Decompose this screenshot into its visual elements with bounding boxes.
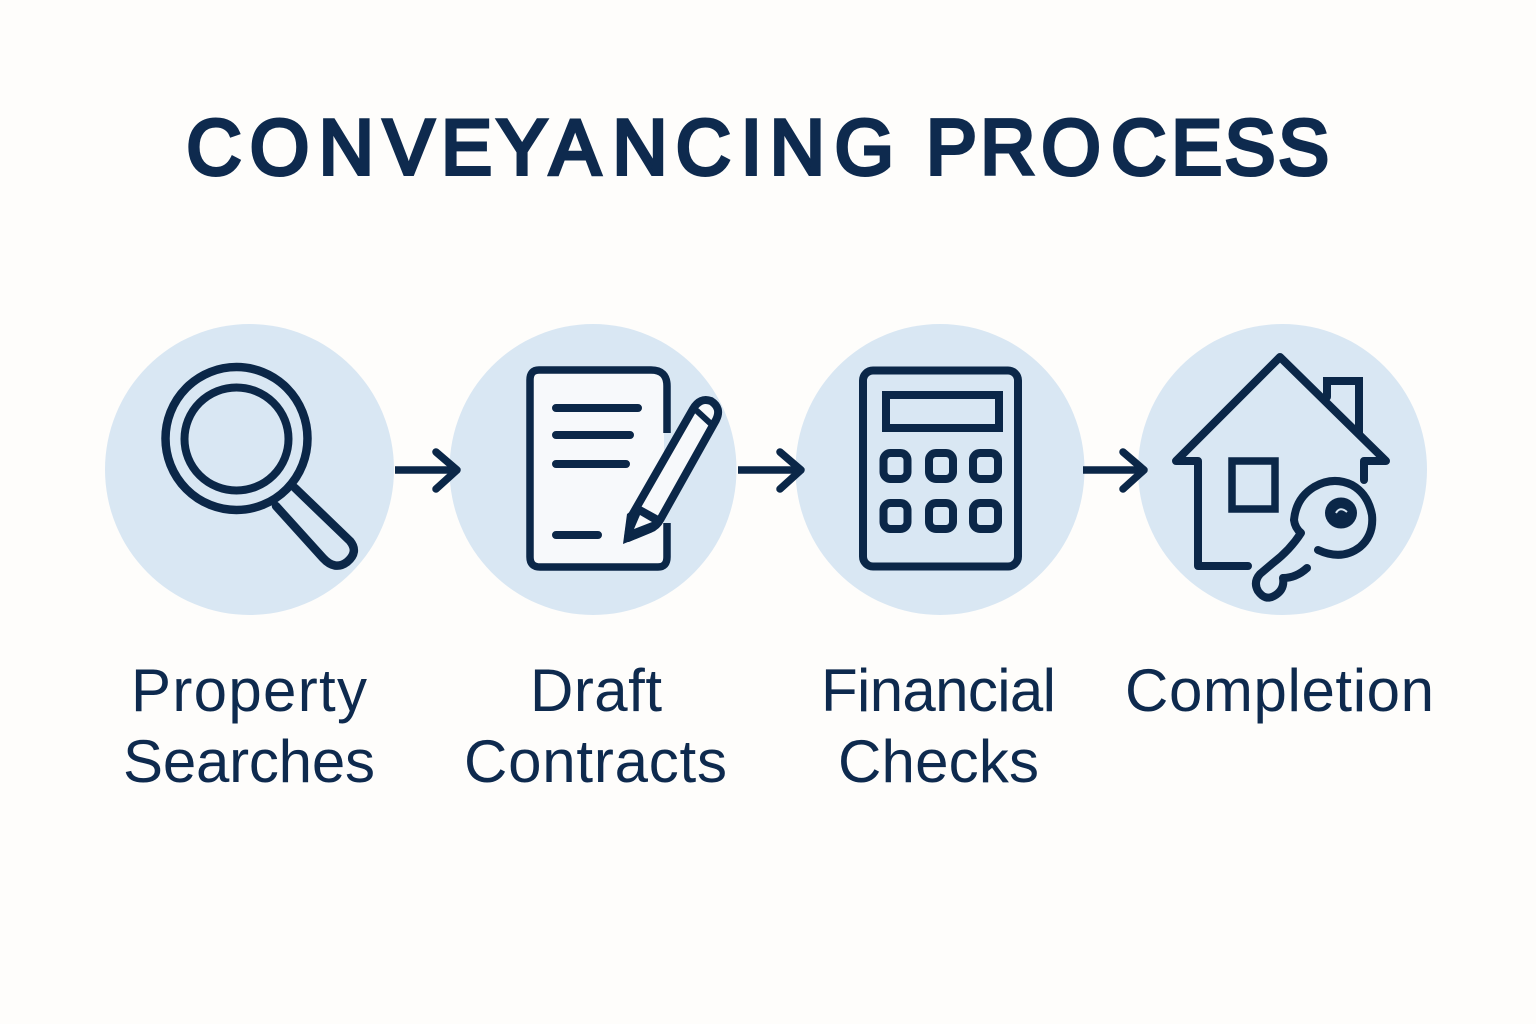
step 2 label: Draft bbox=[530, 657, 662, 724]
step 3 label: Financial bbox=[821, 657, 1056, 724]
arrow 2 bbox=[738, 466, 800, 474]
step 1 circle bbox=[105, 324, 394, 615]
chimney bbox=[1327, 381, 1359, 433]
step 1: property searches bbox=[105, 324, 394, 795]
step 1 label: Property bbox=[131, 657, 367, 724]
step 4 label: Completion bbox=[1125, 657, 1434, 724]
text lines bbox=[556, 408, 638, 535]
icon: house with key bbox=[1176, 357, 1386, 598]
icon: calculator bbox=[863, 370, 1018, 566]
step 4 circle bbox=[1138, 324, 1427, 615]
arrowhead 2 bbox=[780, 452, 801, 489]
window bbox=[1232, 461, 1275, 509]
step 1 label: Searches bbox=[123, 728, 375, 795]
arrow 1 bbox=[395, 466, 456, 474]
pencil bbox=[628, 400, 718, 538]
step 2 circle bbox=[450, 324, 736, 615]
arrowhead 1 bbox=[436, 452, 457, 489]
title: CONVEYANCING PROCESS bbox=[186, 104, 1329, 191]
step 3: financial checks bbox=[796, 324, 1084, 795]
key hole bbox=[1325, 498, 1357, 528]
icon: document and pencil bbox=[530, 370, 718, 567]
step 2: draft contracts bbox=[450, 324, 736, 795]
step 3 label bbox=[821, 657, 1056, 795]
house outline bbox=[1176, 357, 1386, 566]
arrowhead 3 bbox=[1123, 452, 1144, 489]
step 3 circle bbox=[796, 324, 1084, 615]
step 3 label: Checks bbox=[838, 728, 1039, 795]
step 4: completion bbox=[1125, 324, 1434, 724]
step 2 label: Contracts bbox=[464, 728, 727, 795]
key bbox=[1256, 481, 1372, 598]
arrow 3 bbox=[1083, 466, 1143, 474]
icon: magnifying glass bbox=[166, 367, 354, 566]
document page bbox=[533, 373, 664, 564]
step 1 label bbox=[123, 657, 375, 795]
step 2 label bbox=[464, 657, 727, 795]
